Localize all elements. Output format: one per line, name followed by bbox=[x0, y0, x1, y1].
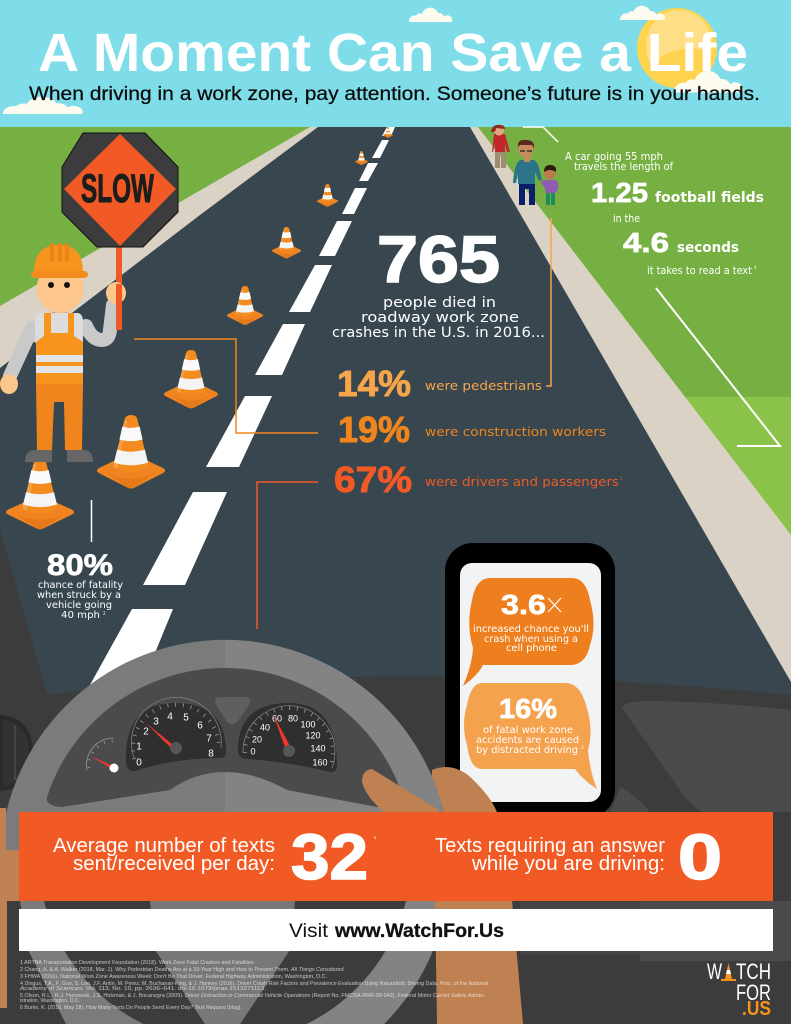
hand back on wheel bbox=[430, 767, 497, 812]
speech bubble: 16 percent: 16% bbox=[499, 693, 557, 724]
speech bubble: 16 percent: accidents are caused bbox=[476, 735, 579, 746]
stat: construction workers bbox=[338, 409, 606, 450]
phone bbox=[445, 543, 615, 818]
gauge: tachometer: 4 bbox=[167, 712, 173, 722]
gauge: tachometer: 7 bbox=[206, 734, 212, 744]
stat: drivers and passengers bbox=[334, 459, 623, 500]
speech bubble: 3.6x bbox=[463, 578, 594, 686]
subtitle: When driving in a work zone, pay attention. Someone’s future is in your hands. bbox=[29, 84, 760, 105]
stat: 80 percent bbox=[37, 549, 123, 621]
orange stats bar: 32 bbox=[291, 821, 368, 893]
speech bubble: 3.6x: increased chance you'll bbox=[473, 624, 589, 635]
gauge: speedometer: 120 bbox=[305, 730, 321, 740]
footnotes: 2 Chang, A. & A. Walker (2018, Mar. 1). Why Pedestrian Deaths Are at a 33-Year High and How to Prevent Them. All Things Considered. bbox=[20, 967, 345, 973]
callout: football fields: football fields bbox=[655, 190, 764, 206]
stat: 80 percent: 2 bbox=[103, 611, 106, 616]
gauge: speedometer: 80 bbox=[288, 714, 298, 724]
connector line: construction workers bbox=[134, 339, 318, 433]
centre triangle bbox=[215, 697, 250, 724]
gauge: tachometer bbox=[126, 697, 226, 771]
gauge: fuel bbox=[87, 738, 118, 772]
gauge: speedometer: 160 bbox=[312, 758, 328, 768]
hand thumb on wheel bbox=[362, 769, 440, 812]
icon: clouds bbox=[3, 6, 743, 114]
gauge: tachometer: 8 bbox=[208, 748, 214, 760]
stat: 80 percent: vehicle going bbox=[46, 600, 112, 611]
hard hat bbox=[31, 243, 88, 278]
stat: 765 deaths bbox=[332, 222, 545, 341]
arms bbox=[10, 305, 113, 376]
website banner bbox=[19, 909, 773, 951]
speech bubble: 16 percent bbox=[464, 683, 597, 789]
stat: construction workers: 19% bbox=[338, 409, 410, 450]
stat: 80 percent: 40 mph bbox=[61, 610, 100, 621]
stat: drivers and passengers: 1 bbox=[620, 476, 623, 481]
dashboard bbox=[0, 676, 791, 1024]
pedestrians bbox=[491, 124, 558, 205]
logo: Watch For Us: FOR bbox=[736, 980, 771, 1005]
speech bubble: 16 percent: by distracted driving bbox=[476, 745, 578, 756]
stat: pedestrians: were pedestrians bbox=[425, 378, 542, 393]
connector line: drivers bbox=[257, 482, 318, 629]
footnotes: istration, Washington, D.C. bbox=[20, 998, 80, 1004]
website banner: Visit bbox=[289, 921, 329, 942]
reflective vest bbox=[36, 313, 83, 384]
gauge: speedometer: 40 bbox=[260, 722, 270, 732]
gauge: speedometer: 100 bbox=[300, 720, 316, 730]
orange stats bar: sent/received per day: bbox=[73, 853, 275, 875]
gauge: tachometer: 1 bbox=[136, 742, 142, 752]
stat: 765 deaths: roadway work zone bbox=[361, 310, 519, 326]
gauge: speedometer: 0 bbox=[250, 746, 256, 756]
gauge: tachometer: 2 bbox=[143, 726, 149, 738]
gauge: speedometer: 20 bbox=[252, 734, 262, 744]
icon: sign pole bbox=[116, 245, 122, 330]
footnotes: 4 Dingus, T.A., F. Guo, S. Lee, J.F. Antin, M. Perez, M. Buchanan-King, & J. Hankey (2016). Driver Crash Risk Factors and Prevalence Evaluation Using Naturalistic Driving Data. Proc. of the National bbox=[20, 981, 489, 987]
callout: football fields: it takes to read a text bbox=[647, 265, 752, 277]
callout: football fields bbox=[565, 151, 764, 277]
air vent bbox=[0, 717, 31, 789]
gauge: speedometer: 60 bbox=[272, 714, 282, 724]
orange stats bar: while you are driving: bbox=[471, 853, 665, 875]
orange stats bar: Average number of texts bbox=[53, 835, 275, 857]
stat: pedestrians bbox=[337, 363, 542, 404]
speech bubble: 3.6x: crash when using a bbox=[484, 634, 578, 645]
callout: football fields: A car going 55 mph bbox=[565, 151, 663, 163]
logo: Watch For Us: TCH bbox=[736, 959, 771, 984]
speech bubble: 16 percent: of fatal work zone bbox=[483, 725, 573, 736]
sidewalks bbox=[0, 127, 791, 690]
speech bubble: 16 percent: 3 bbox=[581, 745, 584, 750]
callout: football fields: travels the length of bbox=[574, 161, 673, 173]
icon: child bbox=[541, 165, 558, 205]
logo: Watch For Us: .US bbox=[742, 998, 771, 1020]
speech bubble: 3.6x: cell phone bbox=[506, 643, 557, 654]
sky background bbox=[0, 0, 791, 127]
icon: man bbox=[513, 140, 542, 205]
icon: woman bbox=[491, 124, 510, 168]
stat: construction workers: were construction workers bbox=[425, 424, 606, 439]
stat: 765 deaths: people died in bbox=[383, 295, 496, 311]
stat: 80 percent: when struck by a bbox=[37, 590, 121, 601]
callout: football fields: 4.6 bbox=[623, 227, 669, 258]
forearm left bbox=[0, 808, 19, 1008]
footnotes: 1 ARTBA Transportation Development Foundation (2018). Work Zone Fatal Crashes and Fatalities. bbox=[20, 960, 255, 966]
gauge: tachometer: 0 bbox=[136, 758, 142, 768]
title: A Moment Can Save a Life bbox=[38, 23, 748, 83]
connector line: fatality bbox=[90, 500, 92, 542]
gauge: tachometer: 5 bbox=[183, 712, 189, 724]
footnotes: 3 FHWA (2016). National Work Zone Awareness Week: Don't Be That Driver. Federal Highway Administration, Washington, D.C. bbox=[20, 974, 327, 980]
shirt bbox=[35, 313, 83, 343]
gauge: speedometer bbox=[238, 703, 337, 772]
forearm right bbox=[435, 900, 523, 1024]
stat: 80 percent: 80% bbox=[47, 549, 113, 582]
wheel lower spoke bbox=[150, 901, 295, 1024]
stat: 765 deaths: crashes in the U.S. in 2016... bbox=[332, 325, 545, 341]
footnotes bbox=[19, 960, 489, 1011]
grass bbox=[0, 127, 791, 627]
gauge: speedometer: 140 bbox=[310, 744, 326, 754]
dashboard right panel bbox=[520, 701, 791, 961]
logo: Watch For Us bbox=[707, 959, 771, 1020]
footnotes: Academy of Sciences, Vol. 113, No. 10, pp. 2636–641. doi:10.1073/pnas.1513271113. bbox=[19, 986, 266, 992]
callout: football fields: seconds bbox=[677, 240, 739, 256]
callout: football fields: in the bbox=[613, 213, 640, 225]
logo: Watch For Us: W bbox=[707, 959, 722, 984]
icon: logo cone bbox=[721, 963, 736, 981]
road centre dashes bbox=[90, 127, 395, 685]
stat: pedestrians: 14% bbox=[337, 363, 411, 404]
stat: 765 deaths: 765 bbox=[377, 222, 500, 296]
slow sign: SLOW bbox=[81, 167, 154, 211]
traffic cones bbox=[6, 127, 393, 529]
gauge: tachometer: 3 bbox=[153, 716, 159, 728]
steering wheel bbox=[0, 640, 450, 1024]
stat: drivers and passengers: were drivers and passengers bbox=[425, 474, 619, 489]
callout: football fields: 4 bbox=[754, 265, 757, 270]
legs bbox=[36, 384, 83, 450]
icon: boots bbox=[25, 450, 93, 462]
callout: football fields: 1.25 bbox=[591, 177, 648, 208]
orange stats bar bbox=[19, 812, 773, 901]
speech bubble: 3.6x: 3.6 bbox=[501, 589, 546, 620]
footnotes: 6 Burke, K. (2016, May 18). How Many Texts Do People Send Every Day? Text Request (blog). bbox=[20, 1005, 242, 1011]
flagger bbox=[0, 133, 178, 462]
connector line: pedestrians bbox=[546, 218, 551, 386]
decorative field line top bbox=[523, 127, 558, 142]
stat: 80 percent: chance of fatality bbox=[38, 580, 123, 591]
gauge: tachometer: 6 bbox=[197, 720, 203, 732]
icon: sun bbox=[637, 8, 717, 88]
orange stats bar: 6 bbox=[374, 835, 377, 840]
windshield pillar bbox=[0, 530, 48, 704]
wheel lower opening bbox=[44, 901, 406, 1024]
road bbox=[0, 127, 791, 760]
orange stats bar: Texts requiring an answer bbox=[435, 835, 665, 857]
orange stats bar: 0 bbox=[678, 821, 722, 893]
field line lower bbox=[656, 288, 780, 446]
dashboard left of wheel rim bbox=[0, 901, 66, 1024]
footnotes: 5 Olson, R.L., R.J. Hanowski, J.S. Hickman, & J. Bocanegra (2009). Driver Distraction in Commercial Vehicle Operations (Report No. FMCSA-RRR-09-042). Federal Motor Carrier Safety Admin- bbox=[20, 993, 485, 999]
slow sign bbox=[62, 133, 178, 247]
stat: drivers and passengers: 67% bbox=[334, 459, 412, 500]
hands bbox=[0, 282, 126, 394]
neck and head bbox=[36, 265, 84, 313]
website banner: www.WatchFor.Us bbox=[334, 921, 504, 942]
